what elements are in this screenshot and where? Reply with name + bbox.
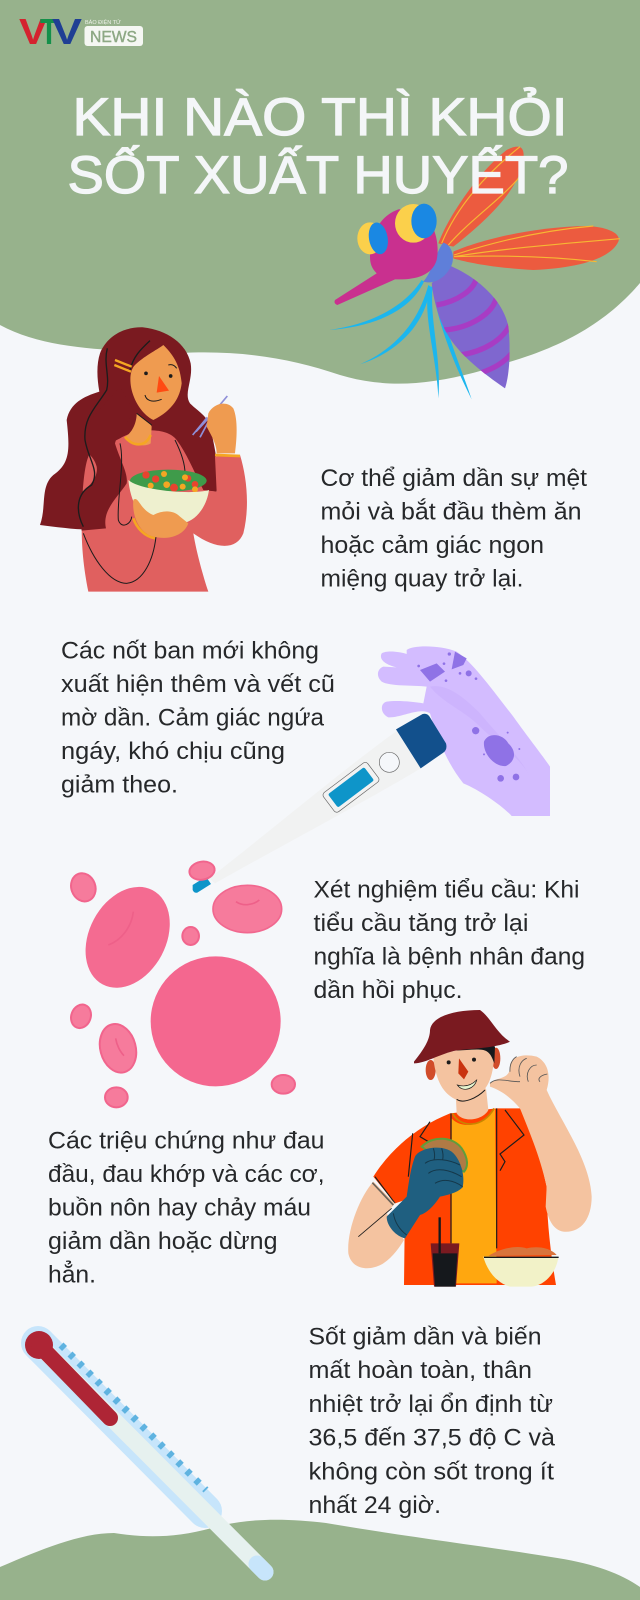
neck (125, 413, 152, 445)
text block 4: buồn nôn hay chảy máu (48, 1194, 311, 1222)
thermometer cap (396, 714, 446, 768)
stem tip (257, 1564, 265, 1572)
text block 3: nghĩa là bệnh nhân đang (314, 944, 585, 970)
lower cuff (133, 518, 155, 538)
burger (422, 1139, 467, 1172)
thermometer button (379, 752, 399, 772)
purple hand (378, 646, 550, 816)
food bowl (483, 1257, 558, 1287)
front hair lock (79, 387, 133, 531)
thermometer screen (322, 761, 380, 814)
hat (414, 1010, 510, 1063)
fries on bowl (488, 1247, 557, 1256)
text block 4: Các triệu chứng như đau (48, 1128, 324, 1154)
illustration: blood cells (67, 860, 295, 1107)
illustration: woman eating salad (40, 327, 247, 592)
bowl rim (484, 1255, 559, 1259)
text block 1: miệng quay trở lại. (320, 566, 524, 592)
text block 5 (308, 1324, 555, 1519)
thermometer tip (193, 877, 211, 893)
text block 4: đầu, đau khớp và các cơ, (48, 1161, 324, 1188)
large oval cell (69, 872, 187, 1002)
hand shading (430, 686, 530, 777)
shirt outline (83, 440, 185, 583)
text block 5: nhất 24 giờ. (308, 1492, 441, 1519)
salad toppings (142, 471, 198, 492)
text block 4: giảm dần hoặc dừng (48, 1228, 278, 1255)
text block 1: hoặc cảm giác ngon (320, 532, 544, 559)
thermometer body (209, 731, 421, 883)
mosquito abdomen (430, 263, 513, 390)
small cells (67, 860, 295, 1107)
logo: VTV News: BÁO ĐIỆN TỬ (85, 18, 121, 26)
illustration: hand rash and digital thermometer (193, 646, 550, 893)
mosquito head (335, 208, 438, 305)
right arm (490, 1055, 592, 1232)
rash spots (417, 652, 520, 782)
cell top right (213, 885, 282, 933)
illustration: glass thermometer (25, 1331, 265, 1572)
jacket (373, 1108, 556, 1285)
title: KHI NÀO THÌ KHỎI (72, 87, 568, 147)
title: SỐT XUẤT HUYẾT? (68, 145, 568, 205)
text block 2: Các nốt ban mới không (61, 638, 319, 664)
fork (193, 396, 227, 437)
yellow t-shirt (452, 1108, 497, 1283)
text block 2: ngáy, khó chịu cũng (61, 738, 285, 765)
arm line (358, 1208, 392, 1237)
hair (452, 1042, 495, 1063)
ears (426, 1048, 500, 1080)
lower hand (133, 499, 188, 538)
top green background wave (0, 0, 640, 384)
blue glove (387, 1148, 463, 1238)
text block 2: mờ dần. Cảm giác ngứa (61, 704, 324, 732)
logo: VTV News (19, 11, 143, 52)
mercury (25, 1331, 110, 1418)
text block 4: hẳn. (48, 1260, 96, 1288)
text block 5: nhiệt trở lại ổn định từ (308, 1391, 553, 1418)
raised hand (207, 404, 237, 453)
face (130, 345, 182, 420)
text block 3 (314, 876, 585, 1004)
finger lines (490, 1057, 547, 1083)
eyes and smile (137, 365, 177, 425)
neck (456, 1088, 488, 1119)
mosquito eyes (357, 204, 437, 256)
icon: mosquito (329, 147, 620, 399)
logo: VTV News: NEWS (90, 29, 137, 46)
drink cup (431, 1217, 459, 1287)
collar (125, 435, 151, 444)
hand lines and cuff (215, 455, 240, 456)
text block 3: tiểu cầu tăng trở lại (314, 910, 528, 937)
thermometer stem (39, 1345, 265, 1572)
left arm (348, 1182, 404, 1268)
hair strands (78, 341, 150, 527)
sleeve edge (372, 1183, 393, 1205)
back hair (40, 327, 218, 530)
text block 3: Xét nghiệm tiểu cầu: Khi (314, 876, 580, 904)
text block 1: Cơ thể giảm dần sự mệt (320, 465, 587, 492)
facial features (447, 1058, 485, 1101)
mosquito right wing (453, 226, 620, 270)
collar (453, 1108, 494, 1124)
text block 5: Sốt giảm dần và biến (308, 1324, 542, 1350)
illustration: man eating (348, 1010, 592, 1287)
bowl (128, 480, 209, 523)
title (68, 87, 568, 205)
salad (130, 470, 207, 492)
logo: VTV News: V (19, 11, 47, 52)
text block 2: xuất hiện thêm và vết cũ (61, 671, 335, 698)
text block 2: giảm theo. (61, 772, 178, 798)
logo: VTV News: T (40, 11, 58, 52)
thermometer glass (38, 1343, 205, 1511)
text block 2 (61, 638, 335, 798)
bottom green background wave (0, 1520, 640, 1600)
text block 4 (48, 1128, 324, 1288)
mosquito neck (423, 243, 453, 282)
text block 3: dần hồi phục. (314, 977, 462, 1004)
nose (157, 376, 169, 393)
hair clip (114, 360, 132, 372)
text block 1 (320, 465, 587, 592)
text block 1: mỏi và bắt đầu thèm ăn (320, 498, 582, 526)
scale ticks (61, 1345, 206, 1490)
text block 5: không còn sốt trong ít (308, 1458, 554, 1485)
pink shirt (82, 430, 247, 592)
mosquito upper wing (438, 147, 524, 247)
jacket lines (375, 1108, 524, 1248)
text block 5: 36,5 đến 37,5 độ C và (308, 1425, 555, 1452)
cell creases (108, 900, 259, 1056)
mosquito legs (329, 280, 472, 399)
face (433, 1047, 494, 1101)
text block 5: mất hoàn toàn, thân (308, 1357, 532, 1384)
large round cell (151, 956, 281, 1086)
logo: VTV News: V (52, 11, 82, 52)
